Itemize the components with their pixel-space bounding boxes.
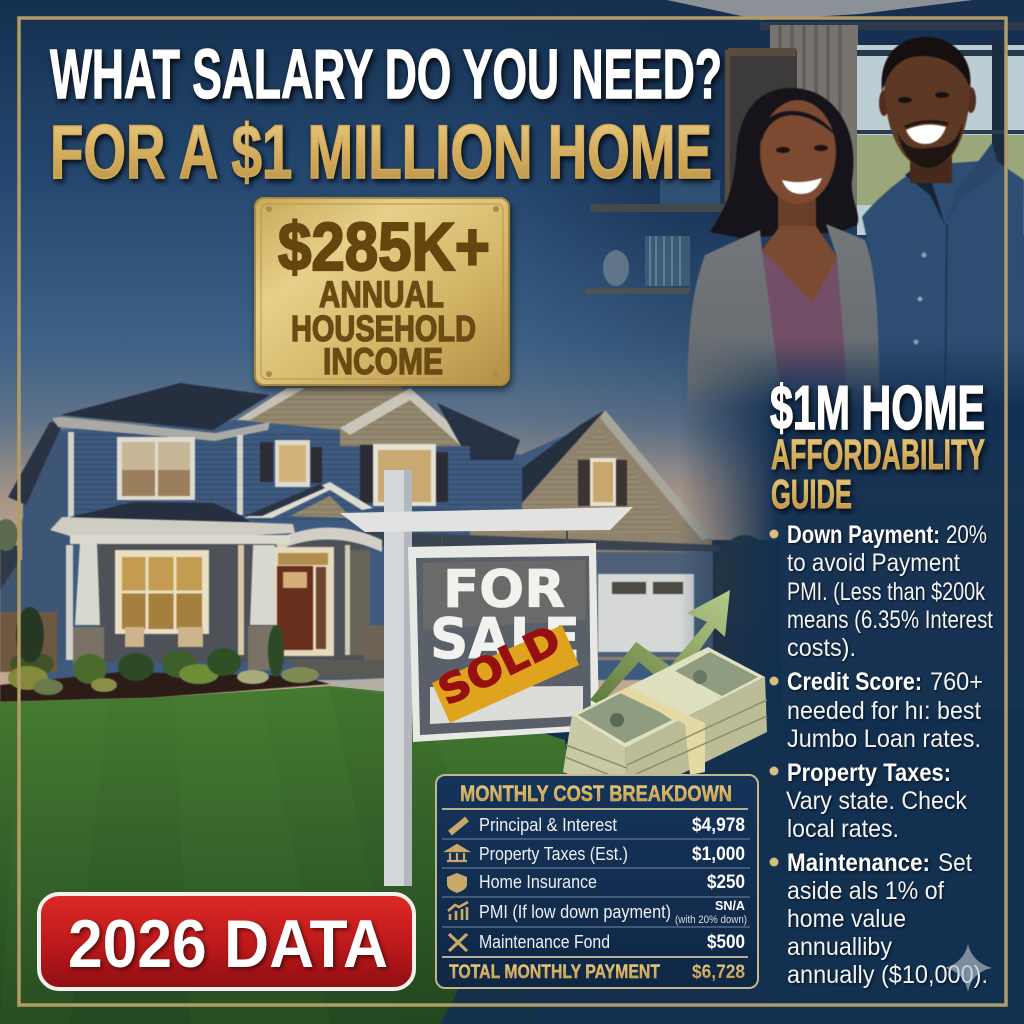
bullet: maintenance: annually ($10,000). (787, 961, 988, 989)
row: property taxes: $1,000 (692, 844, 745, 865)
icon: rising bars (448, 902, 468, 920)
plaque caption (291, 274, 476, 382)
row: pmi: PMI (If low down payment) (479, 901, 671, 922)
icon: pencil (450, 819, 467, 833)
table title: MONTHLY COST BREAKDOWN (460, 781, 732, 806)
icon: sparkle watermark (945, 944, 992, 992)
row: pmi (448, 898, 747, 926)
sold tag: SOLD (431, 617, 568, 715)
bullet list (770, 521, 993, 989)
bullet: maintenance: aside als 1% of (787, 877, 944, 905)
row: maintenance: Maintenance Fond (479, 931, 610, 952)
plaque caption: INCOME (323, 341, 443, 382)
bullet: property taxes: Vary state. Check (786, 787, 967, 815)
bullet: maintenance: home value (787, 905, 906, 933)
man (862, 37, 1024, 440)
monthly cost breakdown table (436, 775, 758, 988)
bullet: credit score: 760+ (930, 668, 983, 696)
growth arrow (590, 590, 730, 705)
row: pmi: (with 20% down) (675, 914, 747, 926)
woman (687, 88, 879, 445)
row: home insurance: $250 (707, 872, 745, 893)
sign text: SALE (430, 607, 580, 672)
row: principal and interest: $4,978 (692, 815, 745, 836)
row: property taxes: Property Taxes (Est.) (479, 843, 628, 864)
money stacks (563, 647, 767, 800)
plaque caption: ANNUAL (319, 274, 444, 315)
row: home insurance (447, 871, 745, 893)
sign board (408, 543, 599, 742)
row: maintenance: $500 (707, 932, 745, 953)
row: pmi: SN/A (715, 898, 746, 913)
row: property taxes (447, 843, 745, 865)
bullet: credit score: needed for hı: best (787, 697, 981, 725)
background: interior room (554, 0, 1024, 444)
bullet: credit score: Credit Score: (787, 668, 922, 696)
title: FOR A $1 MILLION HOME (50, 110, 712, 195)
bullet: property taxes (770, 759, 967, 843)
house (0, 383, 782, 720)
row: total: TOTAL MONTHLY PAYMENT (449, 962, 660, 983)
bullet: maintenance (770, 849, 988, 989)
bullet: down payment: costs). (787, 634, 856, 662)
bullet: maintenance: annualliby (787, 933, 892, 961)
lawn (0, 686, 570, 1024)
icon: crossed tools (449, 934, 467, 951)
badge: 2026 data: 2026 DATA (68, 906, 388, 982)
icon: shield (447, 873, 467, 893)
sign text (430, 560, 580, 672)
income plaque (255, 198, 509, 385)
lower-right corner fill (540, 740, 770, 1024)
row: total: $6,728 (692, 962, 745, 983)
for sale sign (340, 470, 633, 886)
bullet: maintenance: Set (938, 849, 972, 877)
plaque figure: $285K+ (278, 209, 490, 285)
photo: couple (687, 37, 1024, 445)
right info panel backdrop (684, 346, 1024, 720)
bullet: down payment: to avoid Payment (787, 549, 960, 577)
row: home insurance: Home Insurance (479, 871, 597, 892)
background: dusk sky (0, 0, 1024, 710)
bullet: credit score (770, 668, 983, 753)
row: principal and interest (450, 814, 745, 836)
row: principal and interest: Principal & Interest (479, 814, 617, 835)
bullet: credit score: Jumbo Loan rates. (787, 725, 981, 753)
bullet: down payment: Down Payment: (787, 521, 940, 549)
plaque caption: HOUSEHOLD (291, 308, 476, 349)
row: maintenance (449, 931, 745, 953)
icon: bank (447, 845, 467, 861)
sign text: FOR (443, 560, 565, 620)
title (50, 35, 722, 195)
sign post (340, 470, 633, 886)
panel heading: GUIDE (771, 471, 852, 517)
bullet: down payment: 20% (946, 521, 987, 549)
panel heading (770, 374, 985, 517)
bullet: down payment (770, 521, 993, 662)
bullet: property taxes: local rates. (787, 815, 899, 843)
bullet: property taxes: Property Taxes: (787, 759, 951, 787)
bullet: maintenance: Maintenance: (787, 849, 930, 877)
